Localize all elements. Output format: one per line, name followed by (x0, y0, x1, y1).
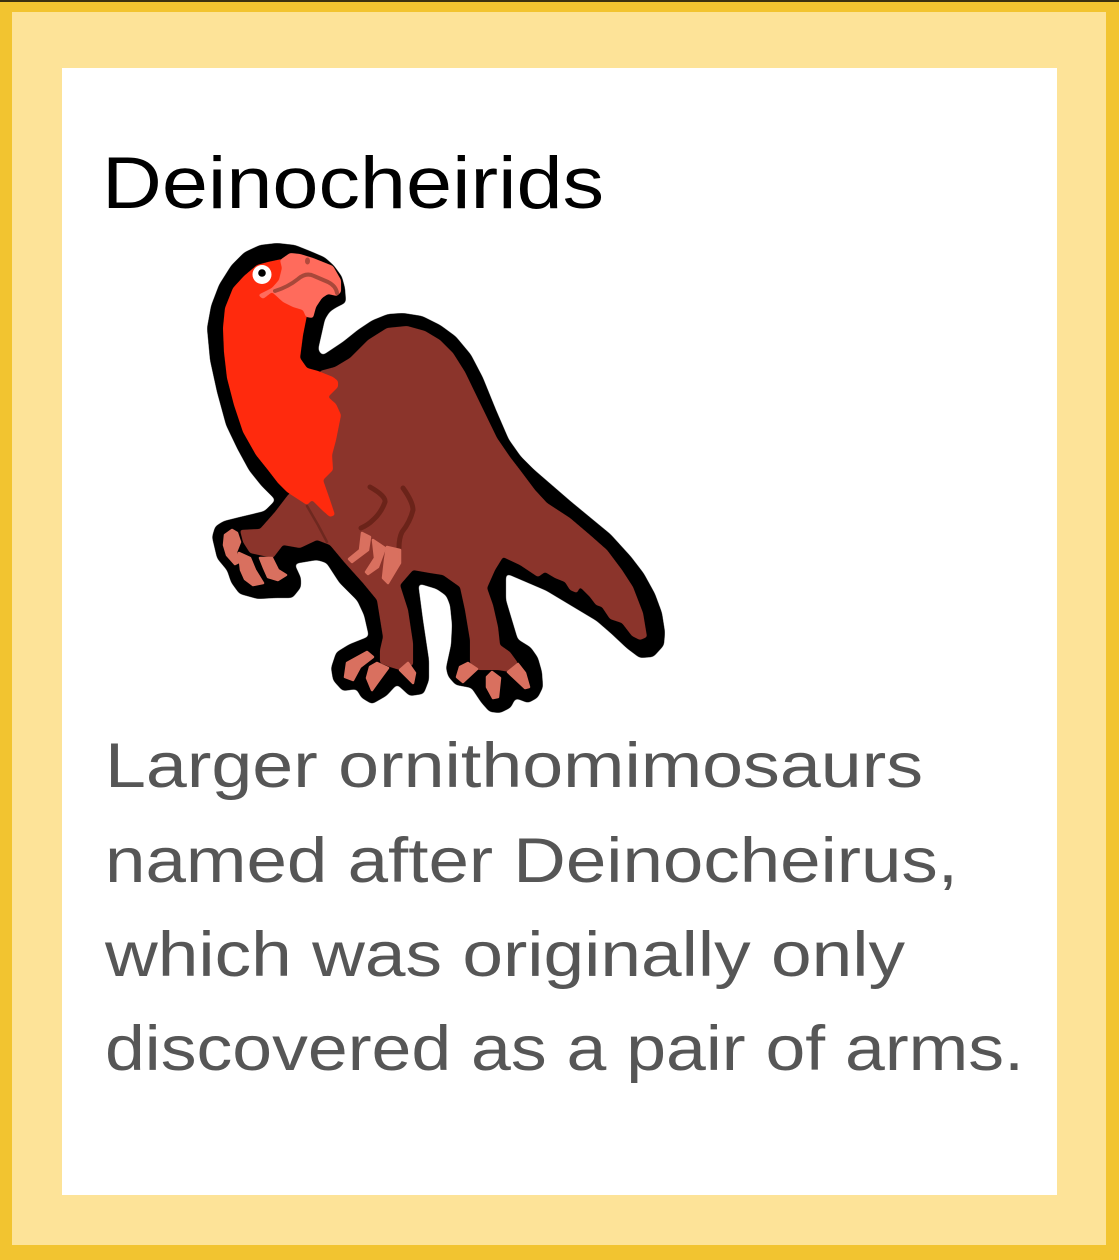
heading: Deinocheirids (102, 143, 604, 224)
red head and neck (223, 259, 341, 517)
mouth line (275, 275, 337, 293)
description text: named after Deinocheirus, (105, 826, 958, 896)
description text: Larger ornithomimosaurs (105, 731, 923, 801)
black outline (208, 244, 664, 712)
nostril (305, 258, 310, 264)
black gaps between hand fingers (236, 541, 266, 582)
beak (258, 253, 341, 318)
description text: discovered as a pair of arms. (105, 1014, 1024, 1084)
eye (252, 265, 272, 284)
panel: white card (62, 68, 1057, 1195)
brown body (240, 326, 647, 672)
foot claws (345, 652, 529, 698)
arm lines (361, 487, 385, 528)
illustration: deinocheirid dinosaur (208, 244, 664, 712)
hand claws (224, 530, 400, 585)
shoulder crease (307, 506, 327, 542)
description text: which was originally only (104, 920, 906, 990)
description text (104, 731, 1024, 1084)
